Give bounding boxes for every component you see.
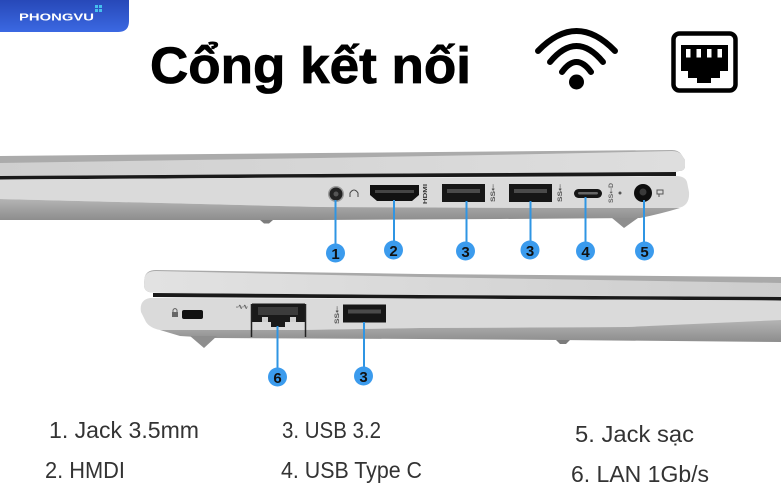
- legend item 5: 5. Jack sạc: [575, 421, 694, 447]
- title: Cổng kết nối: [150, 37, 471, 94]
- callout 4: [576, 197, 595, 261]
- upper laptop base: [0, 176, 689, 208]
- legend item 2: 2. HMDI: [45, 457, 125, 483]
- lower laptop base: [141, 298, 781, 330]
- callout 6: 6: [273, 370, 282, 387]
- callout 3c: 3: [359, 369, 368, 386]
- callout 5: [635, 200, 654, 261]
- icon: LAN port: [674, 34, 736, 90]
- callout 6: [268, 326, 287, 387]
- logo: Phongvu badge: [0, 0, 129, 32]
- port: LAN icon: -∿∿: [236, 304, 248, 311]
- callout 3b: 3: [526, 243, 534, 260]
- port: power jack: [634, 184, 663, 202]
- port: USB 3.2: [335, 304, 386, 324]
- callout 3c: [354, 322, 373, 386]
- port: USB 3.2: SS⇠: [491, 184, 497, 202]
- laptop: upper side view: [0, 150, 689, 228]
- port: USB Type C: [574, 182, 622, 203]
- port: USB Type C: SS⇠D: [609, 182, 615, 203]
- port: USB 3.2 charging: [509, 184, 564, 202]
- callout 1: 1: [331, 246, 340, 263]
- port: USB 3.2: SS⇠: [335, 306, 341, 324]
- upper laptop lid: [0, 150, 685, 177]
- port: audio jack: [328, 186, 358, 202]
- callout 3a: 3: [461, 244, 470, 261]
- logo: Phongvu badge: PHONGVU: [19, 12, 94, 24]
- callout 4: 4: [581, 244, 590, 261]
- port: USB 3.2 charging: SS⇠: [558, 184, 564, 202]
- icon: wifi: [538, 31, 615, 90]
- port: HDMI: [370, 183, 429, 204]
- callout 3a: [456, 201, 475, 261]
- callout 1: [326, 200, 345, 263]
- callout 2: 2: [389, 243, 398, 260]
- port: HDMI: HDMI: [423, 183, 429, 204]
- port: LAN: [252, 304, 306, 337]
- callout 2: [384, 200, 403, 260]
- legend: [45, 417, 709, 487]
- legend item 4: 4. USB Type C: [281, 457, 422, 483]
- callout 5: 5: [640, 244, 649, 261]
- port: lock slot: [172, 308, 203, 319]
- lower laptop lid: [144, 270, 781, 297]
- legend item 1: 1. Jack 3.5mm: [49, 417, 199, 443]
- callout 3b: [520, 201, 540, 260]
- laptop: lower side view: [141, 270, 781, 348]
- legend item 6: 6. LAN 1Gb/s: [571, 461, 709, 487]
- legend item 3: 3. USB 3.2: [282, 417, 381, 443]
- port: USB 3.2: [442, 184, 497, 202]
